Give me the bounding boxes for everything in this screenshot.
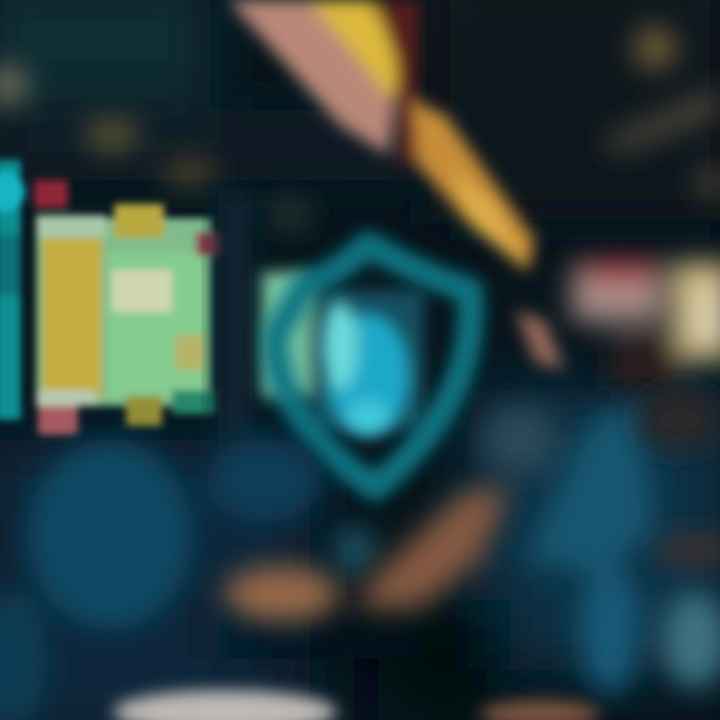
teal strip — [0, 160, 21, 420]
dark divider column — [218, 190, 252, 450]
left screen panel — [0, 160, 220, 435]
yellow column — [42, 238, 102, 398]
shield: light screen behind — [262, 272, 424, 430]
bottom light shapes — [113, 690, 600, 720]
icon: glowing shield core — [323, 301, 410, 437]
ceiling lights — [0, 26, 720, 230]
green column — [108, 252, 208, 397]
icon: shield outline — [275, 244, 471, 488]
people silhouettes in blue — [0, 400, 720, 720]
ceiling light beam: pink and yellow — [228, 0, 565, 370]
screen base — [36, 218, 212, 406]
colored tiles — [34, 180, 68, 208]
hands and skin tones — [224, 390, 720, 622]
right signboards — [572, 260, 720, 390]
